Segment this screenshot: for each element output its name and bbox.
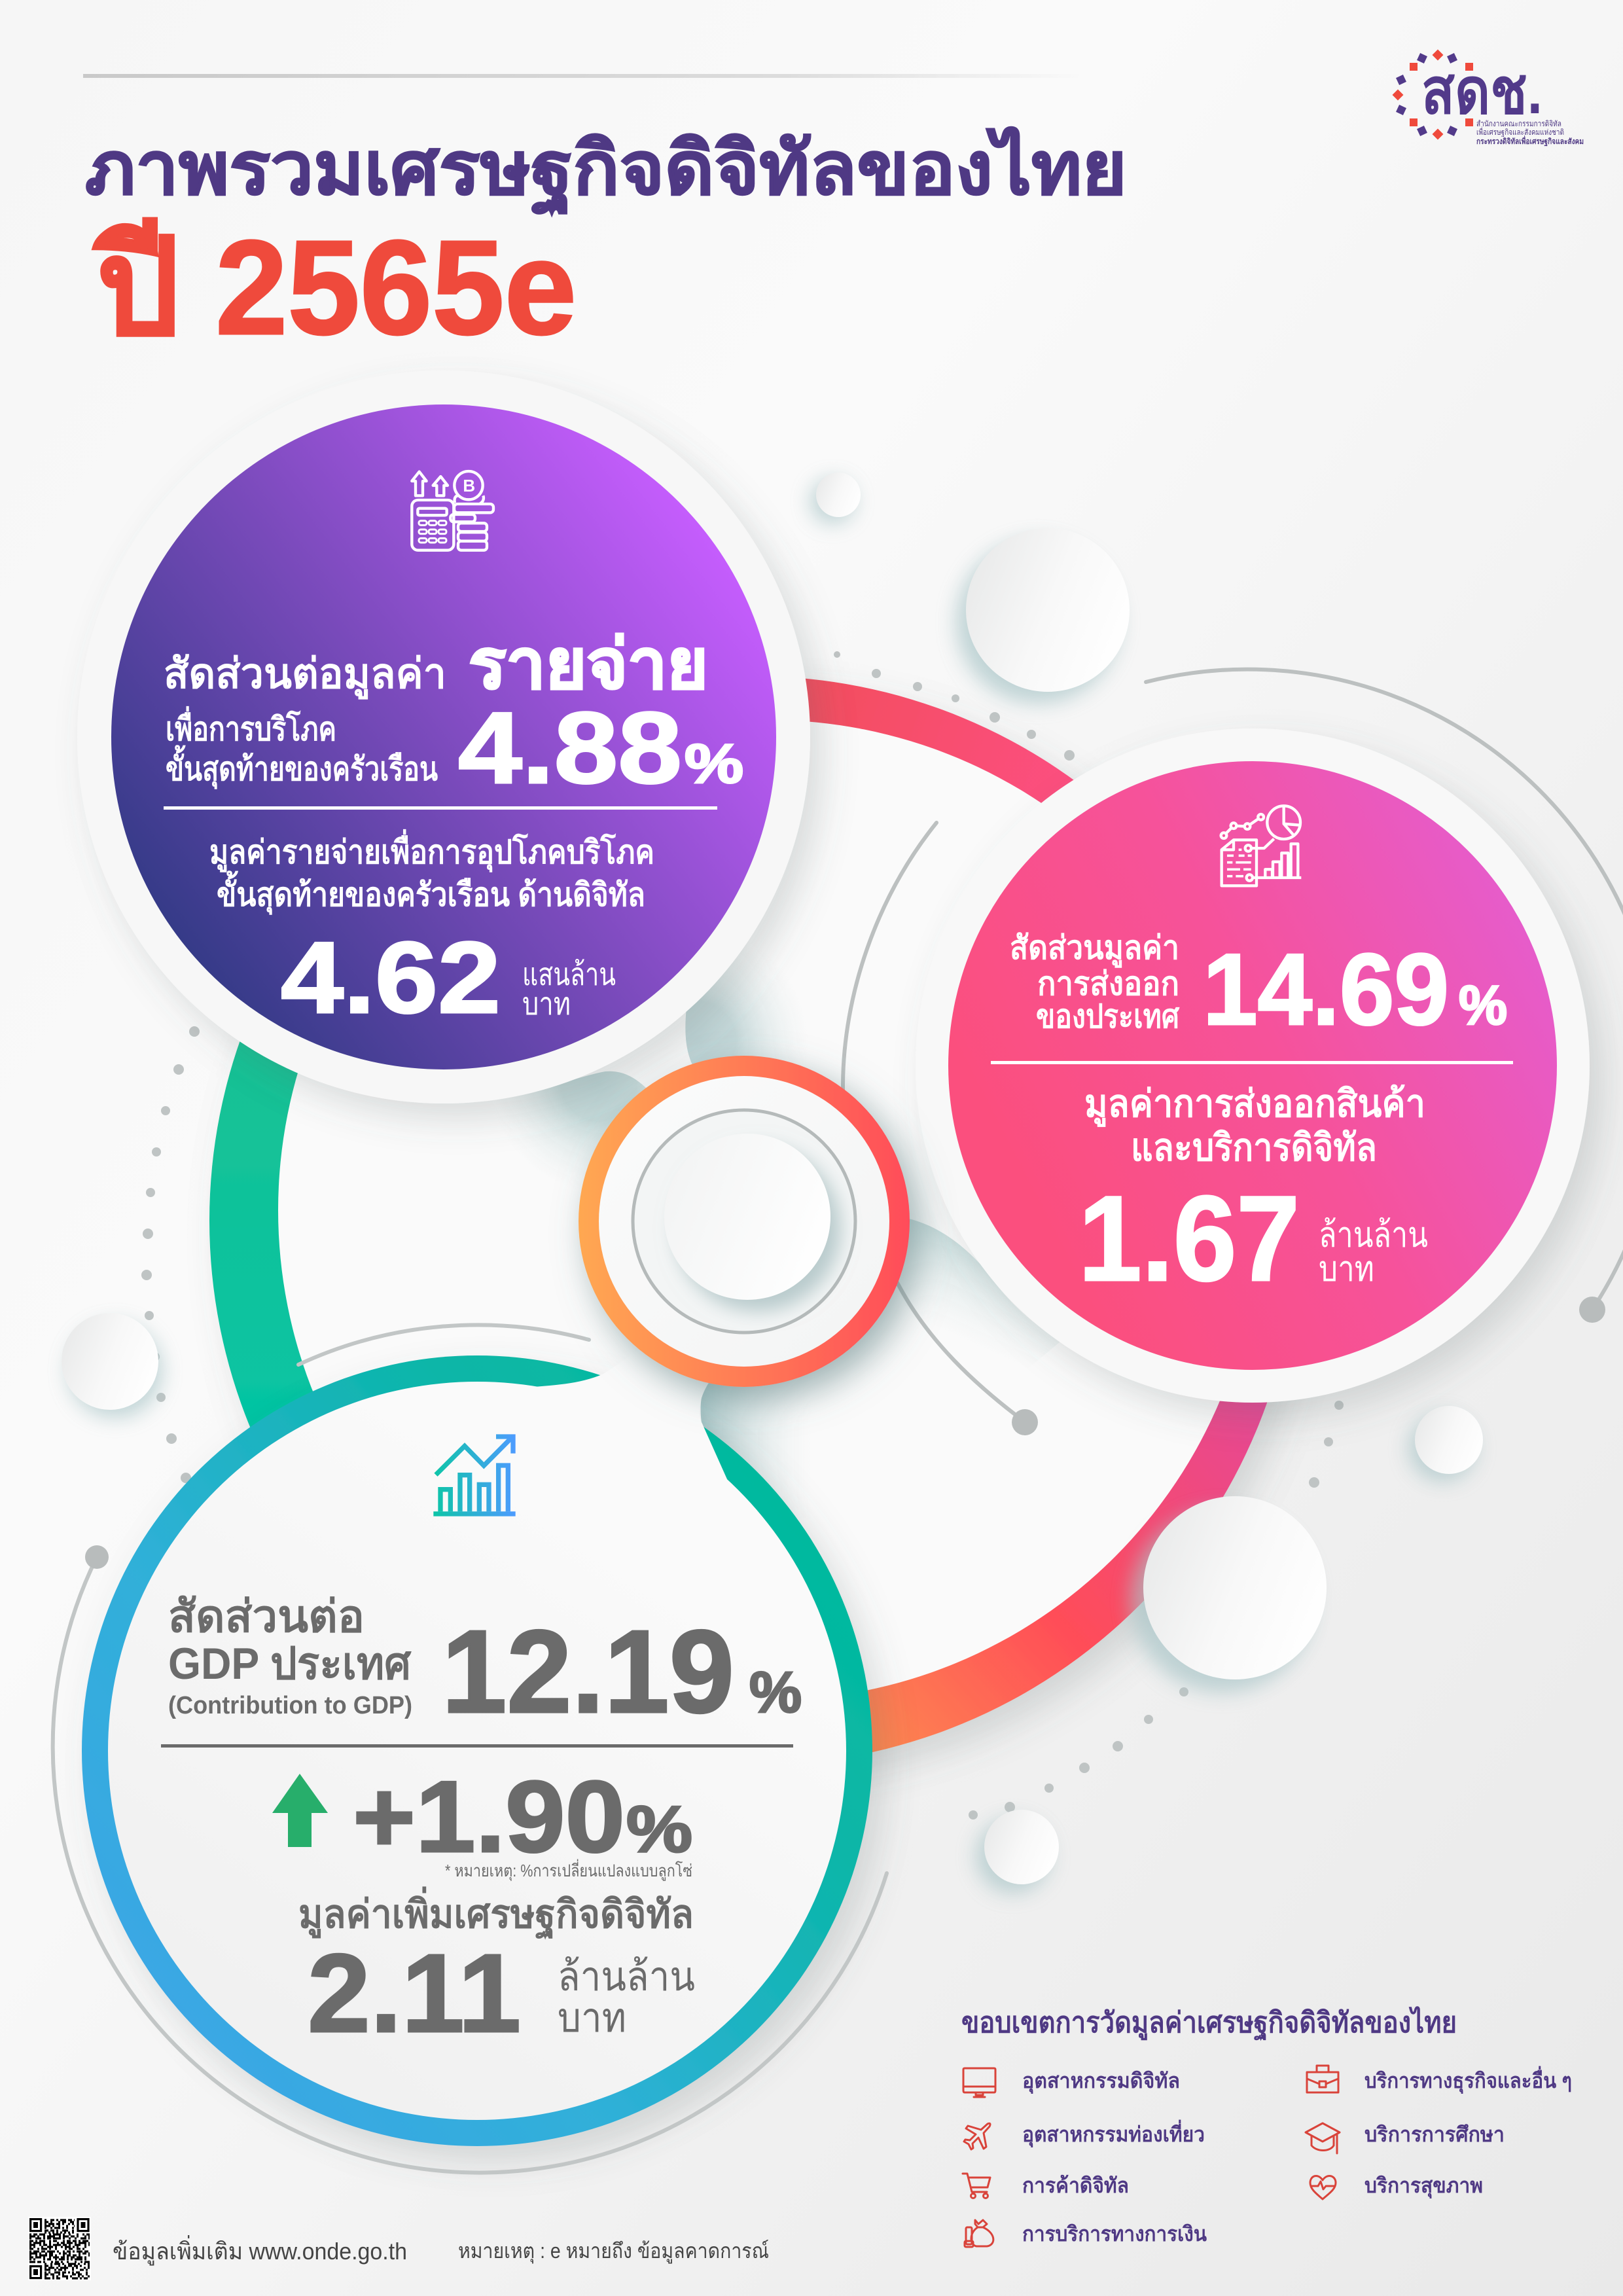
text: GDP share: [168, 1592, 802, 1738]
legend icons: [963, 2066, 1340, 2247]
text: expenditure share: %: [685, 733, 743, 795]
text: expenditure share: [164, 626, 743, 804]
logo: ONDE: สดช.: [1421, 55, 1543, 127]
icon: report and charts: [1221, 806, 1301, 886]
text: value added: ล้านล้าน: [558, 1954, 695, 2000]
title: ภาพรวมเศรษฐกิจดิจิทัลของไทย: [85, 127, 1127, 217]
big ring: [209, 676, 1298, 1765]
text: GDP share: สัดส่วนต่อ: [168, 1592, 365, 1641]
title: ปี 2565e: [92, 213, 577, 363]
icon: calculator and coins: B: [463, 476, 475, 495]
text: expenditure share: เพื่อการบริโภค: [166, 706, 336, 747]
logo: ONDE: เพื่อเศรษฐกิจและสังคมแห่งชาติ: [1476, 126, 1564, 137]
text: export share: 14.69: [1203, 933, 1449, 1046]
text: value added: [298, 1886, 695, 2056]
text: export value: ล้านล้าน: [1319, 1215, 1428, 1255]
text: export share: %: [1459, 975, 1507, 1036]
panel: teal circle ring: [82, 1355, 872, 2146]
legend items: อุตสาหกรรมดิจิทัล: [1022, 2069, 1180, 2094]
text: export value: มูลค่าการส่งออกสินค้า: [1084, 1083, 1425, 1127]
panel: pink circle: [916, 728, 1590, 1403]
text: export value: [1079, 1083, 1428, 1306]
legend items: [1022, 2066, 1572, 2246]
text: expenditure value: มูลค่ารายจ่ายเพื่อการอุปโภคบริโภค: [209, 829, 654, 872]
text: expenditure value: แสนล้าน: [522, 958, 616, 992]
text: growth: %: [626, 1793, 692, 1866]
footer text: [113, 2235, 769, 2266]
text: GDP share: 12.19: [442, 1606, 734, 1738]
icon: growth chart: [433, 1437, 516, 1516]
panel: purple circle: [77, 370, 810, 1103]
text: expenditure share: 4.88: [458, 691, 682, 804]
text: expenditure share: รายจ่าย: [469, 626, 708, 703]
white goo covering ring top: [517, 1322, 727, 1525]
legend items: บริการทางธุรกิจและอื่น ๆ: [1364, 2066, 1572, 2094]
footer text: หมายเหตุ : e หมายถึง ข้อมูลคาดการณ์: [458, 2239, 769, 2264]
legend items: อุตสาหกรรมท่องเที่ยว: [1022, 2119, 1205, 2148]
footer text: ข้อมูลเพิ่มเติม www.onde.go.th: [113, 2235, 407, 2266]
panel: teal circle content: [161, 1437, 802, 2056]
thin arc around teal circle: [53, 1325, 887, 2173]
icon: green up arrow: [272, 1774, 328, 1847]
logo: ONDE: สำนักงานคณะกรรมการดิจิทัล: [1476, 119, 1561, 128]
text: expenditure value: บาท: [522, 987, 571, 1022]
legend items: การบริการทางการเงิน: [1022, 2222, 1207, 2246]
text: expenditure value: 4.62: [281, 921, 501, 1034]
text: GDP share: (Contribution to GDP): [168, 1692, 412, 1719]
text: expenditure value: ขั้นสุดท้ายของครัวเรือน ด้านดิจิทัล: [217, 870, 645, 915]
grey connector arcs: [843, 670, 1623, 1435]
text: growth: +1.90: [353, 1760, 625, 1873]
dot chains: [141, 651, 1344, 1820]
text: value added: 2.11: [308, 1931, 521, 2056]
text: expenditure share: ขั้นสุดท้ายของครัวเรือน: [166, 745, 438, 789]
text: value added: บาท: [558, 1996, 626, 2041]
text: export value: 1.67: [1079, 1172, 1300, 1306]
text: export value: บาท: [1319, 1249, 1374, 1289]
gooey shadows: [419, 916, 1060, 1518]
text: export value: และบริการดิจิทัล: [1131, 1126, 1377, 1169]
text: value added: มูลค่าเพิ่มเศรษฐกิจดิจิทัล: [298, 1886, 694, 1939]
text: export share: สัดส่วนมูลค่า: [1010, 929, 1179, 968]
title: [85, 127, 1127, 363]
logo: ONDE: กระทรวงดิจิทัลเพื่อเศรษฐกิจและสังคม: [1476, 135, 1584, 147]
decorative spheres: [62, 473, 1483, 1893]
text: expenditure share: สัดส่วนต่อมูลค่า: [164, 650, 446, 700]
text: growth: * หมายเหตุ: %การเปลี่ยนแปลงแบบลูกโซ่: [445, 1859, 692, 1881]
legend items: การค้าดิจิทัล: [1022, 2174, 1129, 2197]
text: export share: ของประเทศ: [1036, 998, 1180, 1035]
legend items: บริการสุขภาพ: [1364, 2174, 1483, 2199]
QR code: [28, 2217, 91, 2280]
text: export share: การส่งออก: [1037, 965, 1179, 1002]
text: GDP share: %: [749, 1660, 802, 1725]
center ring: [579, 1056, 910, 1387]
logo: ONDE: [1393, 50, 1584, 147]
panel: scope legend: [961, 2005, 1572, 2247]
legend items: บริการการศึกษา: [1364, 2123, 1505, 2146]
legend heading: ขอบเขตการวัดมูลค่าเศรษฐกิจดิจิทัลของไทย: [961, 2005, 1457, 2041]
icon: calculator and coins: [412, 471, 493, 550]
text: GDP share: GDP ประเทศ: [168, 1639, 412, 1689]
text: export share: [1010, 929, 1507, 1046]
text: expenditure value: [209, 829, 654, 1034]
